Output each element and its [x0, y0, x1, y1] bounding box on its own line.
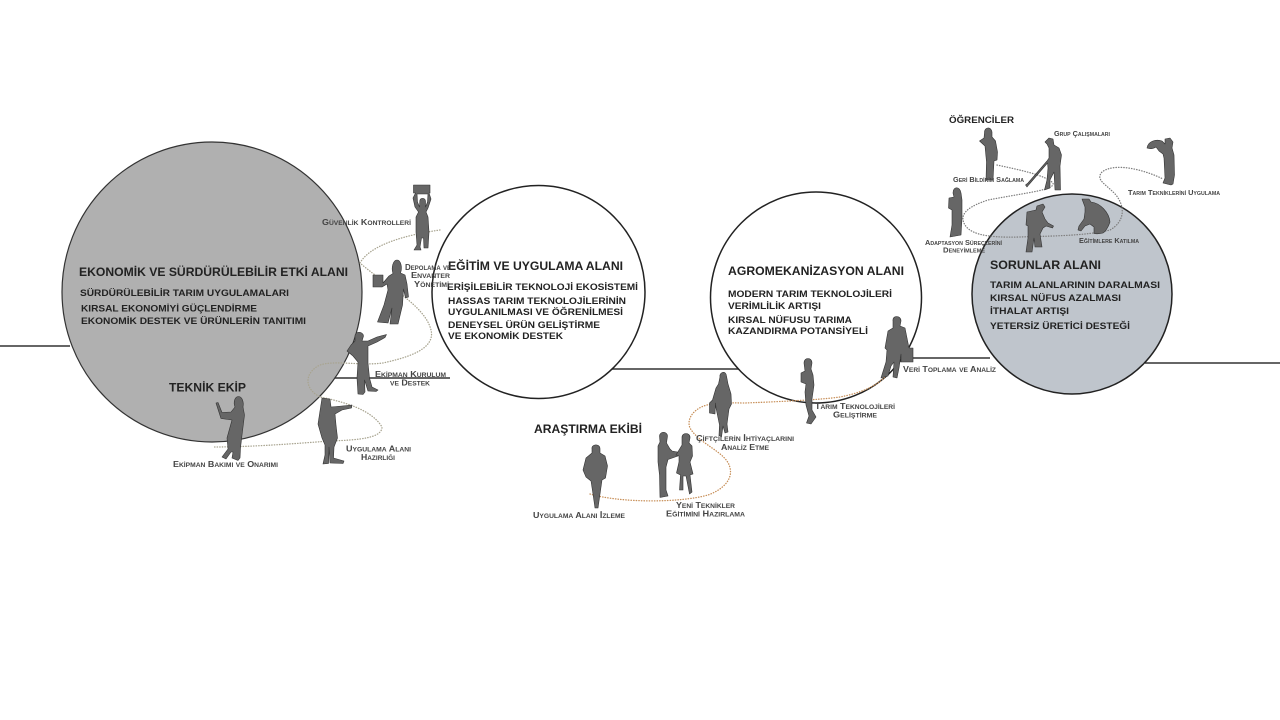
- figure: person pointing: [347, 332, 386, 394]
- label line: Yönetimi: [414, 280, 449, 289]
- figure: crouching person: [1078, 199, 1110, 234]
- heading block: education area: [447, 260, 638, 342]
- figure: monitoring person: [583, 445, 608, 508]
- circle: education area: [432, 186, 645, 398]
- figure: standing person: [801, 358, 816, 424]
- label: data collection: Veri Toplama ve Analiz: [903, 365, 996, 374]
- label line: Deneyimleme: [943, 248, 986, 254]
- item: İTHALAT ARTIŞI: [990, 306, 1069, 317]
- item: KIRSAL NÜFUSU TARIMA: [728, 315, 852, 326]
- item: UYGULANILMASI VE ÖĞRENİLMESİ: [448, 306, 623, 318]
- figure: man shaking hands: [658, 432, 678, 498]
- item: ERİŞİLEBİLİR TEKNOLOJİ EKOSİSTEMİ: [447, 282, 638, 293]
- label: equipment maintenance: Ekipman Bakımı ve Onarımı: [173, 460, 278, 469]
- item: DENEYSEL ÜRÜN GELİŞTİRME: [448, 320, 601, 331]
- heading block: agromechanization area: [728, 265, 904, 337]
- label: giving feedback: Geri Bildirim Sağlama: [953, 176, 1024, 184]
- figure: man with briefcase: [881, 316, 913, 378]
- item: MODERN TARIM TEKNOLOJİLERİ: [728, 289, 892, 300]
- label line: Eğitimini Hazırlama: [666, 510, 746, 518]
- item: VE EKONOMİK DESTEK: [448, 331, 563, 342]
- label: site monitoring: Uygulama Alanı İzleme: [533, 511, 625, 520]
- label line: Uygulama Alanı: [346, 444, 411, 454]
- figure: woman holding box: [413, 185, 431, 250]
- figure: person in long coat: [216, 396, 244, 460]
- heading: research team: ARAŞTIRMA EKİBİ: [534, 423, 642, 436]
- label: site preparation: [346, 444, 411, 462]
- heading: EĞİTİM VE UYGULAMA ALANI: [448, 260, 623, 273]
- figure: person spraying: [1026, 204, 1054, 252]
- item: YETERSİZ ÜRETİCİ DESTEĞİ: [990, 320, 1130, 332]
- item: KAZANDIRMA POTANSİYELİ: [728, 326, 868, 337]
- label line: Hazırlığı: [361, 453, 395, 462]
- item: VERİMLİLİK ARTIŞI: [728, 301, 821, 312]
- label line: Analiz Etme: [721, 443, 769, 452]
- timeline line: [0, 346, 1280, 378]
- figure: woman pointing: [318, 398, 352, 464]
- label line: Envanter: [411, 271, 451, 280]
- label line: Yeni Teknikler: [676, 501, 736, 510]
- figure: woman with flowers: [948, 188, 962, 237]
- label: group work: Grup Çalışmaları: [1054, 131, 1111, 138]
- figure: student with detector: [1026, 138, 1062, 190]
- label: equipment installation: [375, 370, 446, 388]
- label line: Çiftçilerin İhtiyaçlarını: [696, 434, 794, 443]
- figure: woman with fan: [1147, 138, 1174, 185]
- heading: EKONOMİK VE SÜRDÜRÜLEBİLİR ETKİ ALANI: [79, 266, 348, 279]
- label line: Geliştirme: [833, 410, 877, 420]
- item: KIRSAL NÜFUS AZALMASI: [990, 293, 1121, 304]
- dotted path: students: [963, 165, 1163, 237]
- circle: problems area: [972, 194, 1172, 394]
- circle: economic impact area: [62, 142, 362, 442]
- label: safety checks: Güvenlik Kontrolleri: [322, 218, 411, 227]
- label line: Adaptasyon Süreçlerini: [925, 240, 1003, 247]
- label line: Tarım Teknolojileri: [815, 402, 895, 411]
- item: HASSAS TARIM TEKNOLOJİLERİNİN: [448, 296, 626, 307]
- label: developing technologies: [815, 402, 895, 420]
- dotted path: research team: [590, 377, 885, 501]
- heading block: problems area: [990, 260, 1160, 332]
- item: EKONOMİK DESTEK VE ÜRÜNLERİN TANITIMI: [81, 316, 306, 327]
- item: KIRSAL EKONOMİYİ GÜÇLENDİRME: [81, 304, 258, 314]
- label line: Depolama ve: [405, 263, 451, 272]
- figure: woman with bag: [710, 372, 732, 437]
- label: new techniques training: [666, 501, 746, 518]
- label: farmer needs: [696, 434, 794, 452]
- item: SÜRDÜRÜLEBİLİR TARIM UYGULAMALARI: [80, 288, 289, 299]
- heading: AGROMEKANİZASYON ALANI: [728, 265, 904, 278]
- label: adaptation processes: [925, 240, 1003, 254]
- label: storage and inventory: [405, 263, 451, 289]
- figure: woman shaking hands: [676, 434, 693, 494]
- circle: agromechanization area: [710, 192, 922, 403]
- dotted path: technical team: [213, 230, 440, 447]
- label: applying techniques: Tarım Tekniklerini Uygulama: [1128, 190, 1220, 197]
- heading block: economic area: [79, 266, 348, 327]
- label line: Ekipman Kurulum: [375, 370, 446, 379]
- label line: ve Destek: [390, 378, 431, 388]
- heading: technical team: TEKNİK EKİP: [169, 382, 246, 394]
- label: attending trainings: Eğitimlere Katılma: [1079, 237, 1139, 245]
- heading: students: ÖĞRENCİLER: [949, 114, 1014, 126]
- figure: man with clipboard: [373, 260, 408, 324]
- heading: SORUNLAR ALANI: [990, 260, 1101, 272]
- item: TARIM ALANLARININ DARALMASI: [990, 280, 1160, 291]
- figure: student with folder: [980, 128, 998, 180]
